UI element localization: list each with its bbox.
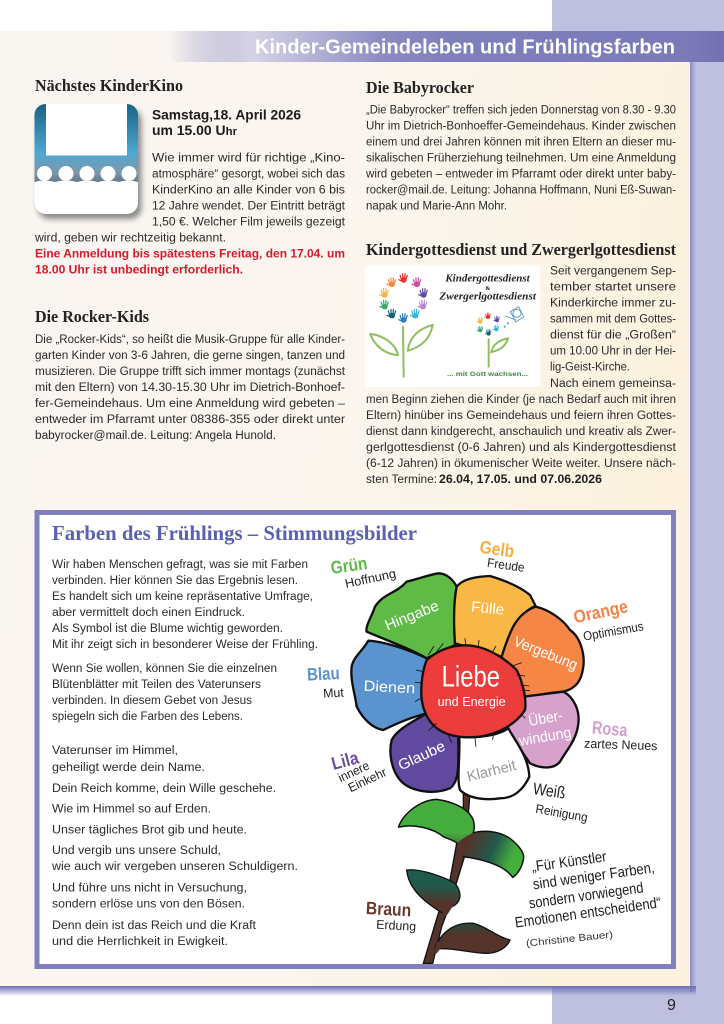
text block: wird, geben wir rechtzeitig bekannt. [34,232,226,244]
text block: intro: Es handelt sich um keine repräsentative Umfrage, [52,591,313,603]
labels: colours and meanings: Einkehr [346,765,389,795]
logo: handprint flowers: ... mit Gott wachsen... [447,371,528,378]
text block: Vaterunser prayer: Wie im Himmel so auf Erden. [52,804,211,816]
labels: colours and meanings: Grün [329,553,369,578]
labels: colours and meanings: Mut [323,686,345,701]
panel bottom shadow [0,986,696,996]
heading: Die Rocker-Kids [35,307,150,326]
right lavender page strip [552,0,724,1024]
labels: colours and meanings: Lila [329,747,362,774]
red notice: Eine Anmeldung bis spätestens Freitag, den 17.04. um [35,248,345,260]
quote: (Christine Bauer) [525,930,613,950]
quote: Emotionen entscheidend“ [514,894,662,932]
date [152,107,301,138]
section: Kindergottesdienst und Zwergerlgottesdienst [365,240,677,486]
title: Kinder-Gemeindeleben und Frühlingsfarben [255,36,675,58]
text block: lig-Geist-Kirche. [550,362,630,374]
panel: Farben des Frühlings [37,512,674,966]
heading: Nächstes KinderKino [35,76,183,95]
text block: dienst für die „Großen“ [550,330,676,342]
panel right shadow [690,62,696,992]
petal: Klarheit: Klarheit [465,757,519,786]
text block: entweder im Pfarramt unter 08386-355 oder direkt unter [35,414,345,426]
text block: fer-Gemeindehaus. Um eine Anmeldung wird gebeten – [35,398,346,410]
header band [170,31,724,62]
text block: 1,50 €. Welcher Film jeweils gezeigt [152,216,346,228]
text block: Vaterunser prayer [51,745,298,948]
text block: intro: verbinden. In diesem Gebet von Jesus [52,695,252,707]
text block: Vaterunser prayer: wie auch wir vergeben unseren Schuldigern. [51,861,298,873]
text block: babyrocker@mail.de. Leitung: Angela Hunold. [35,430,276,442]
text block: atmosphäre“ gesorgt, wobei sich das [152,168,345,180]
text block: Nach einem gemeinsa- [550,378,676,390]
text block: Vaterunser prayer: Denn dein ist das Reich und die Kraft [52,920,257,932]
labels: colours and meanings: Orange [572,596,630,627]
text block: rocker@mail.de. Leitung: Johanna Hoffmann, Nuni Eß-Suwan- [366,184,676,196]
text block [34,152,346,244]
text block: Die „Rocker-Kids“, so heißt die Musik-Gruppe für alle Kinder- [35,334,345,346]
text block: napak und Marie-Ann Mohr. [366,200,507,212]
date: Samstag,18. April 2026 [152,107,301,122]
petal: Klarheit [458,728,529,799]
labels: colours and meanings: Hoffnung [344,566,397,591]
section: Die Rocker-Kids [35,307,346,442]
text block: musizieren. Die Gruppe trifft sich immer montags (zunächst [35,366,346,378]
labels: colours and meanings: Freude [486,556,525,575]
text block: intro: spiegeln sich die Farben des Lebens. [52,711,243,723]
labels: colours and meanings: Optimismus [582,619,645,644]
labels: colours and meanings: innere [336,759,372,785]
text block: Vaterunser prayer: Dein Reich komme, dein Wille geschehe. [52,783,276,795]
text block: Uhr im Dietrich-Bonhoeffer-Gemeindehaus. Kinder zwischen [366,120,676,132]
text block: garten Kinder von 3-6 Jahren, die gerne singen, tanzen und [35,350,345,362]
text block: sammen mit dem Gottes- [550,314,676,326]
labels: colours and meanings: Gelb [478,537,516,561]
text block: intro: Als Symbol ist die Blume wichtig geworden. [52,623,283,635]
quote: sind weniger Farben, [532,859,656,893]
section: Nächstes KinderKino [34,76,346,276]
petal: Hingabe [366,573,457,658]
text block: mit den Eltern) von 14.30-15.30 Uhr im Dietrich-Bonhoef- [35,382,345,394]
text block: Eltern) hinüber ins Gemeindehaus und feiern ihren Gottes- [366,410,676,422]
text block: men Beginn ziehen die Kinder (je nach Bedarf auch mit ihren [366,394,676,406]
labels: colours and meanings: Blau [306,663,340,685]
text block [365,104,676,212]
petal: Überwindung [507,692,579,767]
illustration: flower [306,537,658,803]
petal: Überwindung: Über- [527,706,564,730]
red notice [35,248,345,276]
text block: Vaterunser prayer: Unser tägliches Brot gib und heute. [52,824,247,836]
quote [514,848,662,950]
text block [35,334,346,442]
page number: 9 [667,997,676,1014]
labels: colours and meanings: Rosa [591,717,629,740]
logo: handprint flowers: Zwergerlgottesdienst [438,290,537,302]
petal: Überwindung: windung [517,724,573,750]
heading: Die Babyrocker [366,78,474,97]
text block: intro: Wir haben Menschen gefragt, was sie mit Farben [52,559,308,571]
text block: 26.04, 17.05. und 07.06.2026 [439,474,602,486]
illustration: stem and leaves [398,793,524,963]
illustration: lower labels and quote: Erdung [376,918,417,934]
illustration: lower labels and quote: Braun [365,898,412,920]
illustration: lower labels and quote [365,802,662,950]
heading: Kindergottesdienst und Zwergerlgottesdienst [366,240,676,259]
heading: Farben des Frühlings – Stimmungsbilder [52,521,417,545]
petal: Fülle: Fülle [470,598,505,619]
logo: handprint flowers [365,265,540,387]
text block: intro: verbinden. Hier können Sie das Ergebnis lesen. [52,575,298,587]
text block: Seit vergangenem Sep- [550,266,676,278]
text block: wird gebeten – entweder im Pfarramt oder direkt unter baby- [365,168,676,180]
flower centre: Liebe und Energie [421,645,525,737]
text block: intro: Wenn Sie wollen, können Sie die einzelnen [52,663,277,675]
illustration: lower labels and quote: Reinigung [534,802,589,825]
text block: sten Termine: [366,474,437,486]
text block: tember startet unsere [550,282,676,294]
petal: Dienen: Dienen [363,678,416,697]
text block: Vaterunser prayer: Und führe uns nicht in Versuchung, [52,883,247,895]
red notice: 18.00 Uhr ist unbedingt erforderlich. [35,264,243,276]
labels: colours and meanings [306,537,658,803]
text block: sikalischen Früherziehung teilnehmen. Um eine Anmeldung [366,152,676,164]
text block: Vaterunser prayer: sondern erlöse uns von den Bösen. [52,899,245,911]
text block: intro [52,559,318,723]
quote: „Für Künstler [531,848,607,876]
labels: colours and meanings: Weiß [532,779,567,803]
logo: handprint flowers: & [485,286,490,292]
text block: (6-12 Jahren) in ökumenischer Weite weiter. Unsere näch- [366,458,676,470]
text block: 12 Jahre wendet. Der Eintritt beträgt [152,200,346,212]
text block: intro: Blütenblätter mit Teilen des Vaterunsers [52,679,261,691]
petal: Fülle [454,576,536,657]
quote: sondern vorwiegend [528,879,644,912]
icon: cinema [34,104,142,219]
text block: Kinderkirche immer zu- [550,298,676,310]
text block: Vaterunser prayer: und die Herrlichkeit in Ewigkeit. [52,936,228,948]
section: Die Babyrocker [365,78,676,212]
text block: dienst dann kindgerecht, anschaulich und kreativ als Zwer- [366,426,676,438]
logo: handprint flowers: Kindergottesdienst [444,273,531,285]
petal: Vergebung [502,607,584,698]
text block: „Die Babyrocker“ treffen sich jeden Donnerstag von 8.30 - 9.30 [366,104,676,116]
petal: Hingabe: Hingabe [382,597,441,634]
petal: Glaube [390,713,458,792]
text block: Wie immer wird für richtige „Kino- [152,152,345,164]
text block: KinderKino an alle Kinder von 6 bis [152,184,345,196]
text block: intro: Mit ihr zeigt sich in besonderer Weise der Frühling. [52,639,318,651]
date: um 15.00 Uhr [152,123,238,138]
text block: Vaterunser prayer: Vaterunser im Himmel, [52,745,178,757]
text block: einem und drei Jahren können mit ihren Eltern an dieser mu- [366,136,676,148]
text block [366,266,677,486]
text block: um 10.00 Uhr in der Hei- [550,346,676,358]
petal: Dienen [351,641,427,730]
petal: Glaube: Glaube [396,738,448,774]
text block: Vaterunser prayer: geheiligt werde dein Name. [52,762,205,774]
flower centre: Liebe und Energie: Liebe [442,661,500,694]
text block: intro: aber vermittelt doch einen Eindruck. [52,607,245,619]
flower centre: Liebe und Energie: und Energie [438,694,506,709]
text block: Vaterunser prayer: Und vergib uns unsere Schuld, [52,845,221,857]
text block: gerlgottesdienst (0-6 Jahren) und als Kindergottesdienst [366,442,677,454]
petal: Vergebung: Vergebung [511,633,580,674]
labels: colours and meanings: zartes Neues [584,737,658,753]
